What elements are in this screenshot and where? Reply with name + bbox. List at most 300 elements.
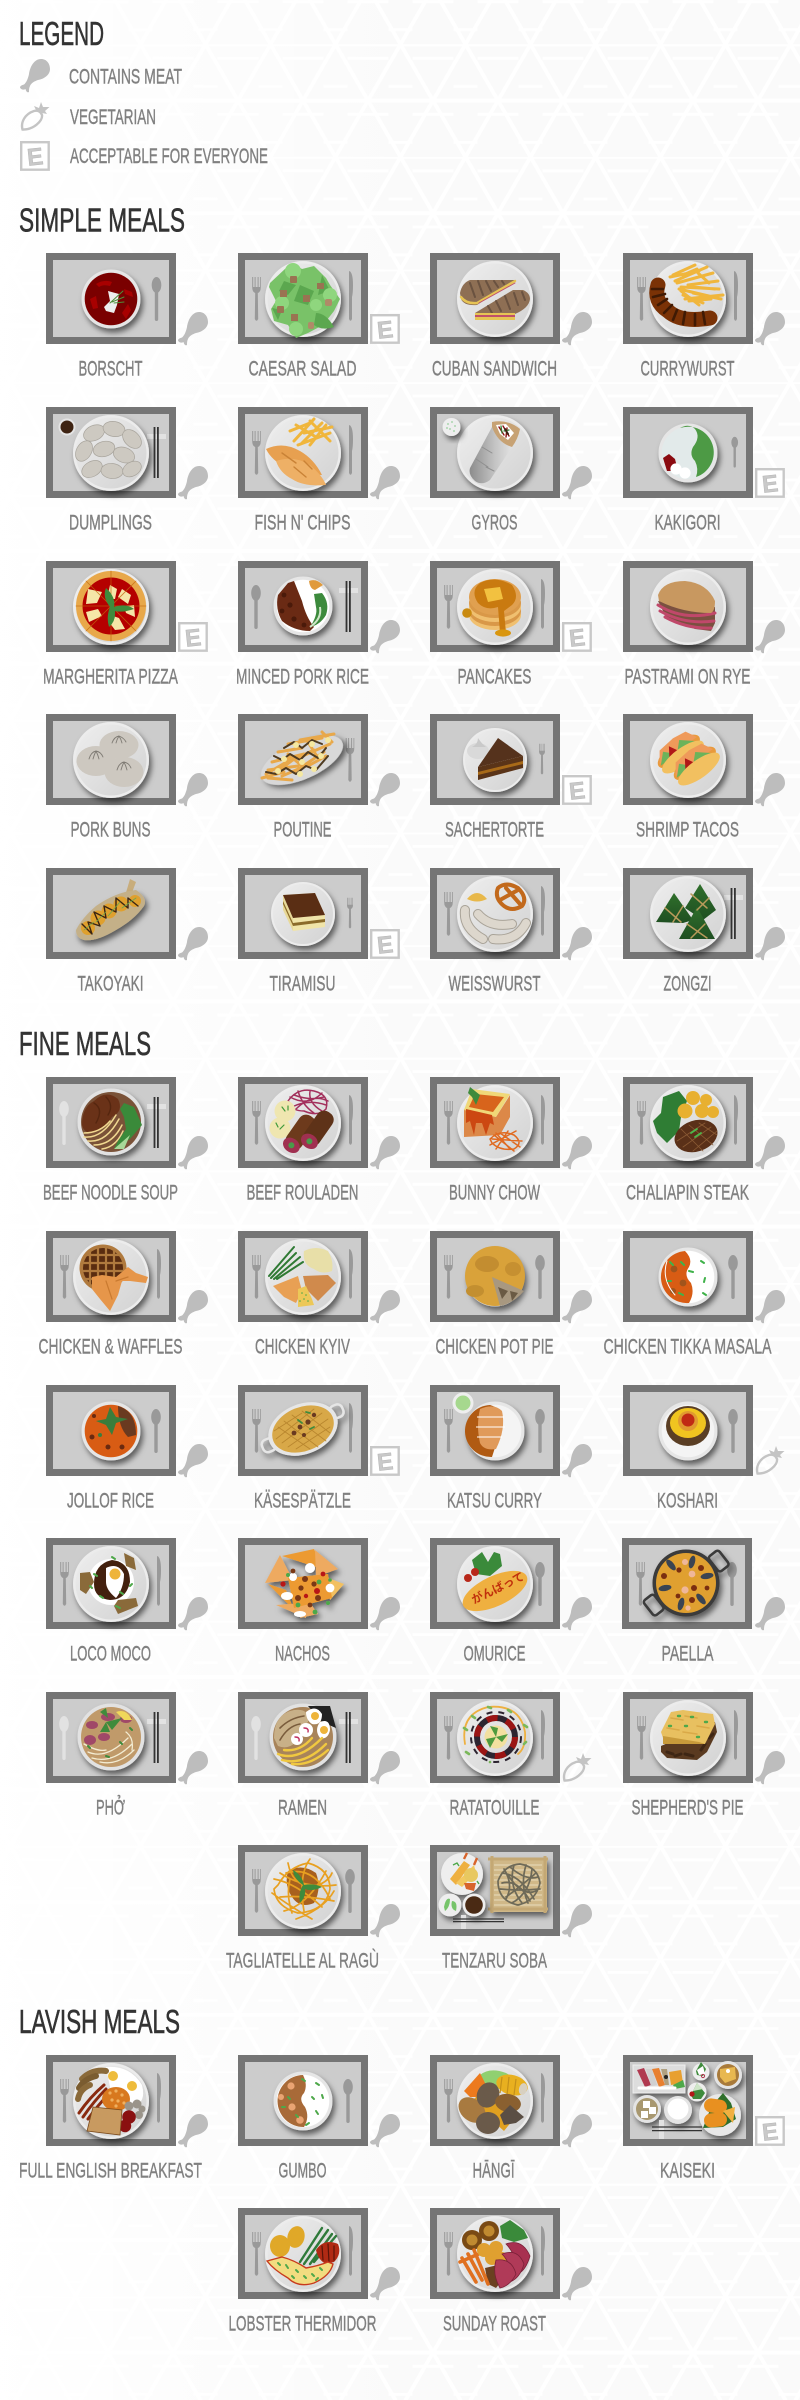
legend text: contains meat: CONTAINS MEAT xyxy=(69,64,182,88)
meal: kasespatzle xyxy=(238,1385,399,1512)
placemat xyxy=(623,1692,753,1783)
label: FISH N' CHIPS xyxy=(254,510,350,534)
placemat xyxy=(46,561,176,652)
dish: kakigori xyxy=(658,424,718,482)
label: KOSHARI xyxy=(657,1488,718,1512)
meal: shrimp tacos xyxy=(623,714,785,842)
icon: fork xyxy=(539,744,545,774)
icon: contains meat xyxy=(562,927,592,960)
icon: knife xyxy=(734,271,738,321)
label: TENZARU SOBA xyxy=(442,1948,547,1972)
icon: acceptable for everyone: E xyxy=(761,470,780,499)
meal: cuban sandwich xyxy=(430,253,592,380)
icon: contains meat xyxy=(755,1597,785,1630)
dish: zongzi xyxy=(650,876,726,952)
icon: contains meat xyxy=(178,773,208,806)
placemat xyxy=(430,407,560,498)
icon: fork xyxy=(444,1255,453,1299)
icon: knife xyxy=(541,1710,545,1760)
meal: pho xyxy=(46,1692,208,1820)
label: BEEF NOODLE SOUP xyxy=(43,1180,178,1204)
placemat xyxy=(430,2208,560,2299)
label: BORSCHT xyxy=(78,356,142,380)
icon: contains meat xyxy=(178,466,208,499)
label: NACHOS xyxy=(275,1642,330,1666)
placemat xyxy=(238,1385,368,1476)
icon: contains meat xyxy=(370,466,400,499)
meal: margherita pizza xyxy=(43,561,207,688)
label: KÄSESPÄTZLE xyxy=(254,1488,351,1512)
dish: ratatouille xyxy=(457,1700,533,1776)
dish: gyros xyxy=(442,415,533,491)
icon: contains meat xyxy=(755,1136,785,1169)
label: SHRIMP TACOS xyxy=(636,818,739,842)
icon: fork xyxy=(637,1716,646,1760)
placemat xyxy=(46,1385,176,1476)
meal: zongzi xyxy=(623,868,785,996)
placemat xyxy=(238,1692,368,1783)
icon: fork xyxy=(444,2232,453,2276)
meal: sachertorte xyxy=(430,714,591,842)
placemat xyxy=(46,1692,176,1783)
label: PORK BUNS xyxy=(70,818,150,842)
dish: ramen xyxy=(270,1704,336,1770)
dish: caesar salad xyxy=(265,261,341,338)
dish: full english breakfast xyxy=(73,2063,149,2139)
dish: beef rouladen xyxy=(265,1085,341,1161)
label: BEEF ROULADEN xyxy=(246,1180,359,1204)
meal: katsu curry xyxy=(430,1385,592,1512)
placemat xyxy=(430,561,560,652)
meal: tagliatelle al ragu xyxy=(226,1845,400,1972)
placemat xyxy=(238,2208,368,2299)
placemat xyxy=(623,1077,753,1168)
meal: currywurst xyxy=(623,253,785,380)
icon: contains meat xyxy=(755,1751,785,1784)
icon: spoon xyxy=(728,1409,738,1453)
icon: fork xyxy=(636,1562,645,1606)
placemat xyxy=(623,407,753,498)
icon: knife xyxy=(349,425,353,475)
dish: sunday roast xyxy=(457,2216,533,2292)
dish: tenzaru soba xyxy=(438,1853,548,1929)
icon: contains meat xyxy=(178,2114,208,2147)
placemat xyxy=(623,253,753,344)
icon: contains meat xyxy=(562,2267,592,2300)
icon: contains meat xyxy=(370,1597,400,1630)
meal: weisswurst xyxy=(430,868,592,996)
dish: kaiseki xyxy=(633,2061,742,2139)
meal: pork buns xyxy=(46,714,208,842)
dish: jollof rice xyxy=(82,1402,140,1460)
placemat xyxy=(622,1538,752,1629)
placemat xyxy=(46,714,176,805)
icon: knife xyxy=(349,1249,353,1299)
dish: fish and chips xyxy=(265,415,341,491)
placemat xyxy=(238,407,368,498)
icon: fork xyxy=(252,431,261,475)
label: MINCED PORK RICE xyxy=(236,664,369,688)
meal: bunny chow xyxy=(430,1077,592,1204)
label: PHỞ xyxy=(96,1794,125,1820)
placemat xyxy=(623,1231,753,1322)
placemat xyxy=(430,868,560,959)
meal: gyros xyxy=(430,407,592,534)
label: CHICKEN & WAFFLES xyxy=(38,1334,182,1358)
icon: contains meat xyxy=(755,312,785,345)
icon: contains meat xyxy=(370,1751,400,1784)
dish: shepherd's pie xyxy=(650,1700,726,1776)
icon: fork xyxy=(252,1101,261,1145)
icon: knife xyxy=(734,1710,738,1760)
dish: beef noodle soup xyxy=(78,1088,144,1156)
icon: knife xyxy=(541,1095,545,1145)
icon: vegetarian xyxy=(757,1446,784,1474)
placemat xyxy=(623,1385,753,1476)
legend text: vegetarian: VEGETARIAN xyxy=(70,105,156,129)
icon: acceptable for everyone xyxy=(371,315,399,345)
label: WEISSWURST xyxy=(448,972,540,996)
icon: contains meat xyxy=(178,1597,208,1630)
dish: weisswurst xyxy=(457,876,533,952)
icon: acceptable for everyone: E xyxy=(376,316,395,345)
dish: chicken tikka masala xyxy=(658,1248,718,1306)
meal: borscht xyxy=(46,253,208,380)
label: LOBSTER THERMIDOR xyxy=(228,2312,376,2336)
dish: borscht xyxy=(82,270,140,328)
dish: poutine xyxy=(254,725,350,795)
dish: koshari xyxy=(658,1402,718,1460)
placemat xyxy=(430,1231,560,1322)
meal: poutine xyxy=(238,714,400,842)
icon: contains meat xyxy=(20,59,50,92)
icon: acceptable for everyone: E xyxy=(184,624,203,653)
label: MARGHERITA PIZZA xyxy=(43,664,178,688)
heading: simple meals: SIMPLE MEALS xyxy=(19,202,185,240)
icon: acceptable for everyone: E xyxy=(376,1448,395,1477)
icon: acceptable for everyone: E xyxy=(568,777,587,806)
dish: shrimp tacos xyxy=(650,722,726,798)
dish: katsu curry xyxy=(452,1392,524,1460)
label: FULL ENGLISH BREAKFAST xyxy=(19,2158,202,2182)
placemat xyxy=(238,1077,368,1168)
label: DUMPLINGS xyxy=(69,510,152,534)
icon: spoon xyxy=(59,1101,69,1145)
label: TAGLIATELLE AL RAGÙ xyxy=(226,1948,379,1972)
label: KATSU CURRY xyxy=(447,1488,542,1512)
meal: kaiseki xyxy=(623,2055,784,2182)
icon: contains meat xyxy=(562,1597,592,1630)
placemat xyxy=(623,868,753,959)
meal: paella xyxy=(622,1538,785,1666)
placemat xyxy=(46,253,176,344)
icon: contains meat xyxy=(562,1444,592,1477)
meal: dumplings xyxy=(46,407,208,534)
icon: acceptable for everyone xyxy=(21,142,49,172)
dish: dumplings xyxy=(58,415,149,491)
meal: koshari xyxy=(623,1385,784,1512)
meal: chaliapin steak xyxy=(623,1077,785,1204)
dish: loco moco xyxy=(73,1546,149,1622)
placemat xyxy=(430,714,560,805)
placemat xyxy=(623,714,753,805)
label: RAMEN xyxy=(278,1796,327,1820)
meal: fish n' chips xyxy=(238,407,400,534)
icon: chopsticks xyxy=(724,888,743,939)
meal: loco moco xyxy=(46,1538,208,1666)
label: KAISEKI xyxy=(660,2158,715,2182)
dish: tagliatelle al ragu xyxy=(265,1853,341,1929)
meal: jollof rice xyxy=(46,1385,208,1512)
dish: minced pork rice xyxy=(274,576,332,636)
meal: beef noodle soup xyxy=(43,1077,208,1204)
placemat xyxy=(46,868,176,959)
placemat xyxy=(238,1231,368,1322)
icon: knife xyxy=(349,1403,353,1453)
icon: contains meat xyxy=(178,1136,208,1169)
icon: acceptable for everyone xyxy=(756,2117,784,2147)
meal: hangi xyxy=(430,2055,592,2182)
icon: acceptable for everyone: E xyxy=(761,2118,780,2147)
icon: acceptable for everyone xyxy=(371,930,399,960)
icon: knife xyxy=(349,271,353,321)
dish: chicken pot pie xyxy=(465,1246,525,1306)
icon: acceptable for everyone xyxy=(371,1447,399,1477)
label: RATATOUILLE xyxy=(450,1796,540,1820)
icon: vegetarian xyxy=(564,1753,592,1781)
icon: contains meat xyxy=(562,312,592,345)
icon: fork xyxy=(444,1409,453,1453)
dish: takoyaki xyxy=(76,879,145,940)
icon: spoon xyxy=(251,1716,261,1760)
icon: fork xyxy=(444,892,453,936)
icon: contains meat xyxy=(178,1444,208,1477)
label: PAELLA xyxy=(662,1642,714,1666)
dish: chicken and waffles xyxy=(73,1239,149,1315)
icon: fork xyxy=(444,1716,453,1760)
meal: omurice xyxy=(430,1538,592,1666)
label: ZONGZI xyxy=(664,972,712,996)
icon: acceptable for everyone: E xyxy=(568,624,587,653)
dish: margherita pizza xyxy=(73,569,149,645)
placemat xyxy=(430,1692,560,1783)
label: SACHERTORTE xyxy=(445,818,544,842)
dish: nachos xyxy=(265,1549,344,1618)
label: JOLLOF RICE xyxy=(67,1488,154,1512)
label: TIRAMISU xyxy=(270,972,336,996)
icon: chopsticks xyxy=(147,427,166,478)
icon: acceptable for everyone: E xyxy=(376,931,395,960)
icon: spoon xyxy=(345,1869,355,1913)
label: POUTINE xyxy=(274,818,332,842)
icon: contains meat xyxy=(562,1136,592,1169)
icon: knife xyxy=(349,2226,353,2276)
meal: caesar salad xyxy=(238,253,399,380)
icon: contains meat xyxy=(755,773,785,806)
icon: chopsticks xyxy=(147,1097,166,1148)
dish: gumbo xyxy=(274,2072,332,2130)
icon: chopsticks xyxy=(147,1712,166,1763)
meal: full english breakfast xyxy=(19,2055,208,2182)
icon: acceptable for everyone xyxy=(179,623,207,653)
dish: currywurst xyxy=(650,261,726,337)
icon: spoon xyxy=(59,1716,69,1760)
icon: contains meat xyxy=(370,620,400,653)
meal: ramen xyxy=(238,1692,400,1820)
placemat xyxy=(46,2055,176,2146)
placemat xyxy=(46,1077,176,1168)
label: KAKIGORI xyxy=(654,510,720,534)
icon: knife xyxy=(157,1556,161,1606)
meal: chicken kyiv xyxy=(238,1231,400,1358)
icon: fork xyxy=(444,2079,453,2123)
icon: chopsticks xyxy=(339,581,358,632)
icon: spoon xyxy=(727,1562,737,1606)
icon: chopsticks xyxy=(339,1712,358,1763)
dish: paella xyxy=(643,1550,730,1617)
icon: spoon xyxy=(151,1409,161,1453)
icon: contains meat xyxy=(562,466,592,499)
icon: fork xyxy=(444,585,453,629)
placemat xyxy=(238,1845,368,1936)
icon: contains meat xyxy=(370,2114,400,2147)
meal: kakigori xyxy=(623,407,784,534)
legend xyxy=(19,16,268,172)
meal: gumbo xyxy=(238,2055,400,2182)
icon: contains meat xyxy=(178,927,208,960)
placemat xyxy=(430,1538,560,1629)
icon: contains meat xyxy=(178,1751,208,1784)
placemat xyxy=(623,561,753,652)
label: HĀNGĪ xyxy=(472,2158,515,2182)
legend heading: LEGEND xyxy=(19,16,104,53)
icon: spoon xyxy=(535,1409,545,1453)
icon: spoon xyxy=(535,1562,545,1606)
label: GYROS xyxy=(472,510,518,534)
icon: acceptable for everyone xyxy=(563,623,591,653)
meal: shepherd's pie xyxy=(623,1692,785,1820)
icon: knife xyxy=(157,1249,161,1299)
dish: kasespatzle xyxy=(260,1392,346,1466)
dish: sachertorte xyxy=(463,728,527,792)
label: GUMBO xyxy=(278,2158,326,2182)
icon: fork xyxy=(60,2079,69,2123)
icon: fork xyxy=(60,1255,69,1299)
icon: acceptable for everyone xyxy=(756,469,784,499)
placemat xyxy=(238,253,368,344)
label: BUNNY CHOW xyxy=(449,1180,540,1204)
icon: contains meat xyxy=(370,2267,400,2300)
legend text: acceptable for everyone: ACCEPTABLE FOR EVERYONE xyxy=(70,144,268,168)
icon: knife xyxy=(349,1095,353,1145)
dish: pork buns xyxy=(73,722,149,798)
icon: contains meat xyxy=(755,1290,785,1323)
icon: fork xyxy=(252,1255,261,1299)
icon: vegetarian xyxy=(22,102,50,130)
icon: fork xyxy=(637,277,646,321)
icon: contains meat xyxy=(755,620,785,653)
dish: bunny chow xyxy=(457,1085,533,1161)
label: CAESAR SALAD xyxy=(248,356,356,380)
placemat xyxy=(238,561,368,652)
icon: spoon xyxy=(535,1255,545,1299)
placemat xyxy=(238,714,368,805)
icon: fork xyxy=(252,277,261,321)
icon: spoon xyxy=(251,585,261,629)
label: SUNDAY ROAST xyxy=(443,2312,546,2336)
placemat xyxy=(46,407,176,498)
placemat xyxy=(430,1845,560,1936)
icon: knife xyxy=(541,2073,545,2123)
label: CUBAN SANDWICH xyxy=(432,356,557,380)
icon: contains meat xyxy=(178,312,208,345)
placemat xyxy=(238,868,368,959)
meal: nachos xyxy=(238,1538,400,1666)
dish: lobster thermidor xyxy=(265,2216,341,2292)
meal: chicken & waffles xyxy=(38,1231,208,1358)
dish: tiramisu xyxy=(271,882,335,946)
icon: fork xyxy=(252,1869,261,1913)
icon: contains meat xyxy=(178,1290,208,1323)
meal: minced pork rice xyxy=(236,561,400,688)
icon: contains meat xyxy=(562,2114,592,2147)
icon: contains meat xyxy=(370,1904,400,1937)
dish: chicken kyiv xyxy=(265,1239,341,1315)
icon: knife xyxy=(157,2073,161,2123)
icon: fork xyxy=(60,1562,69,1606)
meal: tiramisu xyxy=(238,868,399,996)
dish: pho xyxy=(78,1704,144,1770)
placemat xyxy=(430,253,560,344)
label: TAKOYAKI xyxy=(78,972,144,996)
placemat xyxy=(238,1538,368,1629)
dish: omurice: がんばって xyxy=(469,1568,527,1608)
label: CHICKEN POT PIE xyxy=(436,1334,554,1358)
placemat xyxy=(430,1077,560,1168)
meal: sunday roast xyxy=(430,2208,592,2336)
dish: chaliapin steak xyxy=(650,1085,726,1161)
icon: spoon xyxy=(728,1255,738,1299)
meal: takoyaki xyxy=(46,868,208,996)
meal: chicken tikka masala xyxy=(604,1231,785,1358)
placemat xyxy=(46,1231,176,1322)
label: CHICKEN KYIV xyxy=(255,1334,350,1358)
meal: chicken pot pie xyxy=(430,1231,592,1358)
icon: knife xyxy=(541,2226,545,2276)
placemat xyxy=(46,1538,176,1629)
heading: fine meals: FINE MEALS xyxy=(19,1026,151,1063)
label: LOCO MOCO xyxy=(70,1642,151,1666)
icon: contains meat xyxy=(370,1136,400,1169)
meal: beef rouladen xyxy=(238,1077,400,1204)
placemat xyxy=(430,2055,560,2146)
icon: fork xyxy=(444,1101,453,1145)
label: CURRYWURST xyxy=(640,356,734,380)
meal: pancakes xyxy=(430,561,591,688)
icon: fork xyxy=(252,1409,261,1453)
heading: lavish meals: LAVISH MEALS xyxy=(19,2004,180,2041)
icon: knife xyxy=(541,886,545,936)
meal: pastrami on rye xyxy=(623,561,785,688)
meal: lobster thermidor xyxy=(228,2208,400,2336)
icon: spoon xyxy=(731,437,738,468)
icon: fork xyxy=(637,1101,646,1145)
icon: fork xyxy=(252,2232,261,2276)
icon: contains meat xyxy=(370,1290,400,1323)
icon: spoon xyxy=(343,2079,353,2123)
label: PANCAKES xyxy=(458,664,532,688)
icon: spoon xyxy=(152,277,161,321)
